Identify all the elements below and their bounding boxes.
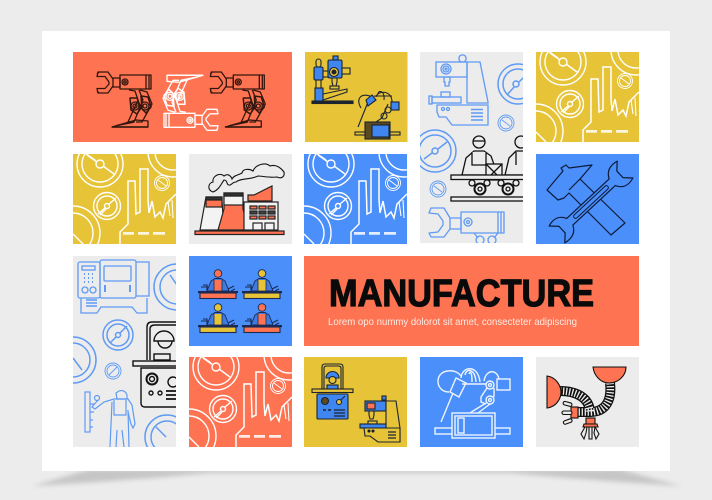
panel: title xyxy=(304,256,639,346)
icon: worker bottom right xyxy=(242,304,282,332)
panel: yellow drill and welding robot xyxy=(305,52,408,142)
icon: control machine xyxy=(312,364,353,419)
icon: left suction cup xyxy=(547,376,561,408)
icon: top suction cup xyxy=(593,367,626,383)
icon: bottom gripper xyxy=(581,418,599,439)
icon: wrench xyxy=(548,161,634,243)
icon: dark control machine xyxy=(133,322,180,407)
icon: robot arm white xyxy=(163,75,218,130)
icon: worker top left xyxy=(198,270,238,298)
panel: red factory pattern xyxy=(162,330,314,463)
icon: blue machine xyxy=(429,55,488,125)
panel: blue welding robot xyxy=(420,357,523,447)
panel: factory illustration xyxy=(189,154,292,244)
icon: radial drill xyxy=(312,56,353,104)
icon: welding robot xyxy=(355,92,400,139)
panel: blue workers xyxy=(189,256,292,346)
icons: blue gauges xyxy=(73,263,176,447)
subtitle: Lorem opo nummy dolorot sit amet, consecteter adipiscing xyxy=(328,316,577,328)
icon: smoke xyxy=(209,164,284,192)
icon: robot arm dark right xyxy=(210,72,265,127)
panel: robot arms xyxy=(73,52,292,142)
panel: grey tall with lathe and operator xyxy=(73,256,176,447)
icon: hammer xyxy=(547,165,625,235)
icon: left gripper xyxy=(562,401,578,425)
panel: yellow factory pattern top right xyxy=(509,25,661,158)
icon: press machine xyxy=(360,396,400,442)
icon: flexible hoses xyxy=(560,383,610,413)
card shadow xyxy=(32,469,682,486)
icons: blue gauges xyxy=(420,63,523,198)
icon: blue lathe xyxy=(78,260,149,313)
icon: blue gripper xyxy=(429,208,504,244)
white card xyxy=(42,31,670,471)
icon: worker top right xyxy=(242,270,282,298)
panel: yellow factory pattern left xyxy=(46,127,198,260)
panel: blue factory pattern xyxy=(277,127,429,260)
icon: workers and conveyor xyxy=(451,136,531,201)
icon: blue operator xyxy=(85,391,135,447)
panel: tools xyxy=(536,154,639,244)
icon: white welding robot xyxy=(435,369,510,438)
panel: grey hose robot xyxy=(536,357,639,447)
panel: yellow machines xyxy=(304,357,407,447)
title: MANUFACTURE xyxy=(329,273,594,315)
icon: factory xyxy=(195,186,284,234)
panel: grey tall with machine and workers xyxy=(420,52,523,243)
icon: worker bottom left xyxy=(198,304,238,332)
icon: robot arm dark left xyxy=(97,72,152,127)
